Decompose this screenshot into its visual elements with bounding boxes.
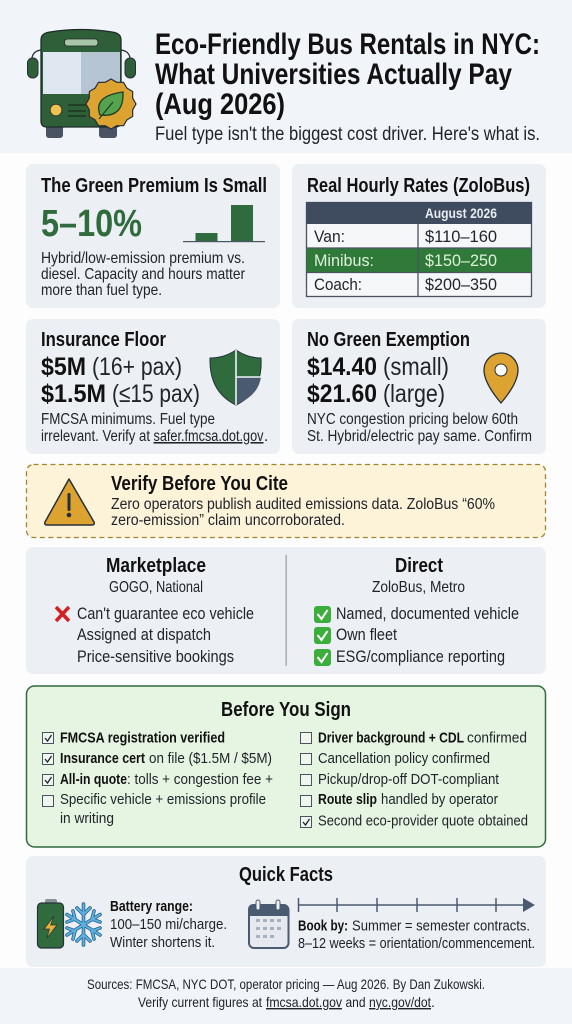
stat: $14.40 xyxy=(307,353,449,381)
text: battery range: Winter shortens it. xyxy=(110,934,215,951)
checklist: left column: FMCSA registration verified xyxy=(60,730,225,746)
checklist: right column: handled by operator xyxy=(381,791,498,808)
stat: $1.5M: (≤15 pax) xyxy=(112,380,200,408)
rates table: $200–350 xyxy=(425,275,497,294)
heading: green premium: The Green Premium Is Small xyxy=(41,175,267,197)
text: verify note: Zero operators publish audited emissions data. ZoloBus “60% xyxy=(111,496,495,513)
column: marketplace: Marketplace xyxy=(106,555,206,577)
panel: insurance floor xyxy=(26,319,280,454)
text: book by: Summer = semester contracts. xyxy=(352,918,530,934)
heading: quick facts: Quick Facts xyxy=(239,864,333,886)
icon: map pin xyxy=(484,353,518,403)
text: verify note: zero-emission” claim uncorroborated. xyxy=(111,512,345,529)
checkbox icons xyxy=(42,732,312,828)
heading: before you sign: Before You Sign xyxy=(221,699,351,721)
rates table: Van: xyxy=(314,227,345,246)
icon: calendar xyxy=(248,900,289,948)
column: direct: ESG/compliance reporting xyxy=(336,647,505,666)
column: direct: Named, documented vehicle xyxy=(336,604,519,623)
text: book by: Book by: xyxy=(298,918,348,934)
checklist: right column: Route slip xyxy=(318,791,377,808)
text: premium explanation: Hybrid/low-emission premium vs. xyxy=(41,250,245,267)
icon: green checks xyxy=(314,606,331,666)
stat: $14.40: $14.40 xyxy=(307,353,377,381)
checklist: left column: All-in quote xyxy=(60,771,127,788)
text: book by xyxy=(298,918,535,952)
column: marketplace: GOGO, National xyxy=(109,579,203,596)
heading: no green exemption: No Green Exemption xyxy=(307,329,470,351)
text: premium explanation: diesel. Capacity and hours matter xyxy=(41,266,246,283)
checklist: right column: Pickup/drop-off DOT-compliant xyxy=(318,771,500,788)
checklist: left column: on file ($1.5M / $5M) xyxy=(149,750,272,767)
title xyxy=(155,28,540,121)
checklist: right column: Cancellation policy confirmed xyxy=(318,750,490,767)
footer sources: nyc.gov/dot xyxy=(369,994,431,1010)
rates table: $150–250 xyxy=(425,251,497,270)
text: premium explanation: more than fuel type. xyxy=(41,282,162,299)
stat: $21.60: (large) xyxy=(383,380,445,408)
text: battery range xyxy=(110,898,227,951)
text: congestion note: St. Hybrid/electric pay same. Confirm xyxy=(307,428,532,445)
rates table: $110–160 xyxy=(425,227,497,246)
footer sources: . xyxy=(431,994,435,1010)
footer sources: Sources: FMCSA, NYC DOT, operator pricing — Aug 2026. By Dan Zukowski. xyxy=(87,976,485,992)
icon: warning triangle xyxy=(45,479,94,525)
text: premium explanation xyxy=(41,250,246,299)
text: congestion note xyxy=(307,411,532,445)
panel: marketplace vs direct xyxy=(26,547,546,674)
checklist: left column: in writing xyxy=(60,810,114,827)
panel: green premium xyxy=(26,164,280,308)
rates table xyxy=(306,202,532,297)
footer sources: fmcsa.dot.gov xyxy=(266,994,342,1010)
callout: verify before you cite xyxy=(26,464,546,538)
panel: quick facts xyxy=(26,856,546,967)
text: battery range: 100–150 mi/charge. xyxy=(110,916,227,933)
checklist: left column: Insurance cert xyxy=(60,750,145,767)
text: congestion note: NYC congestion pricing below 60th xyxy=(307,411,518,428)
column: marketplace: Can't guarantee eco vehicle xyxy=(77,604,254,623)
title: (Aug 2026) xyxy=(155,88,285,121)
checklist: right column: confirmed xyxy=(467,730,527,746)
icon: shield xyxy=(210,350,261,405)
text: FMCSA note: irrelevant. Verify at xyxy=(41,428,151,445)
text: FMCSA note: safer.fmcsa.dot.gov xyxy=(154,428,264,445)
column: direct: Own fleet xyxy=(336,625,397,644)
text: FMCSA note xyxy=(41,411,268,445)
icon: battery xyxy=(38,899,64,948)
stat: $21.60: $21.60 xyxy=(307,380,377,408)
text: book by: 8–12 weeks = orientation/commencement. xyxy=(298,935,535,952)
stat: $1.5M xyxy=(41,380,200,408)
icon: snowflake xyxy=(67,904,100,945)
stat: $5M: $5M xyxy=(41,353,86,381)
heading: insurance floor: Insurance Floor xyxy=(41,329,166,351)
footer band xyxy=(0,968,572,1024)
stat: $5M xyxy=(41,353,182,381)
footer sources: and xyxy=(346,994,366,1010)
icon: green bus with leaf badge xyxy=(28,30,136,138)
text: FMCSA note: . xyxy=(264,428,268,445)
arrow: booking timeline xyxy=(298,898,535,912)
checklist: right column xyxy=(318,730,528,830)
rates table: Coach: xyxy=(314,275,362,294)
text: verify note xyxy=(111,496,495,529)
checklist: right column: Second eco-provider quote obtained xyxy=(318,812,528,830)
header band xyxy=(0,0,572,153)
text: FMCSA note: FMCSA minimums. Fuel type xyxy=(41,411,215,428)
stat: $1.5M: $1.5M xyxy=(41,380,106,408)
icon: red cross xyxy=(56,607,69,621)
stat: $14.40: (small) xyxy=(383,353,449,381)
stat: 5–10%: 5–10% xyxy=(41,203,142,245)
panel: no green exemption xyxy=(292,319,546,454)
footer sources xyxy=(87,976,485,1010)
panel: hourly rates xyxy=(292,164,546,308)
column: direct xyxy=(314,555,519,666)
checklist: right column: Driver background + CDL xyxy=(318,730,464,746)
footer sources: Verify current figures at xyxy=(138,994,262,1010)
text: battery range: Battery range: xyxy=(110,898,193,915)
column: direct: Direct xyxy=(395,555,443,577)
column: marketplace: Assigned at dispatch xyxy=(77,625,211,644)
checklist: left column xyxy=(60,730,273,827)
stat: $21.60 xyxy=(307,380,445,408)
rates table: Minibus: xyxy=(314,251,374,270)
rates table: August 2026 xyxy=(425,205,497,221)
stat: $5M: (16+ pax) xyxy=(92,353,182,381)
column: marketplace xyxy=(56,555,254,666)
column: direct: ZoloBus, Metro xyxy=(372,579,465,596)
column: marketplace: Price-sensitive bookings xyxy=(77,647,234,666)
heading: hourly rates: Real Hourly Rates (ZoloBus) xyxy=(307,175,530,197)
checklist: left column: : tolls + congestion fee + xyxy=(127,771,273,788)
panel: before you sign checklist xyxy=(26,686,546,847)
heading: verify: Verify Before You Cite xyxy=(111,473,288,495)
checklist: left column: Specific vehicle + emissions profile xyxy=(60,791,266,808)
bar chart xyxy=(183,205,265,242)
